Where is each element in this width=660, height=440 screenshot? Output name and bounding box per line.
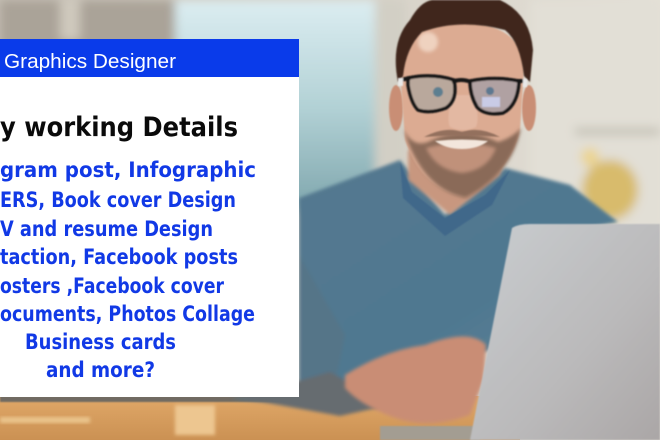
service list bbox=[0, 158, 256, 382]
service list: Business cards bbox=[25, 330, 176, 354]
table top bbox=[0, 396, 520, 440]
service list: and more? bbox=[46, 358, 155, 382]
service list: osters ,Facebook cover bbox=[0, 274, 225, 298]
beard bbox=[403, 128, 521, 198]
nose bbox=[448, 95, 478, 130]
neck bbox=[408, 140, 505, 215]
sweater collar bbox=[400, 162, 510, 236]
ears bbox=[389, 85, 403, 131]
service list: V and resume Design bbox=[0, 217, 213, 241]
header bar bbox=[0, 39, 299, 77]
glasses bbox=[398, 76, 527, 114]
hand and forearm bbox=[345, 336, 486, 423]
face bbox=[400, 22, 524, 197]
service list: ERS, Book cover Design bbox=[0, 188, 236, 212]
panel: services card bbox=[0, 39, 299, 397]
sweater body and arm bbox=[230, 160, 618, 416]
smile bbox=[435, 140, 488, 149]
hair bbox=[396, 0, 533, 82]
service list: taction, Facebook posts bbox=[0, 245, 238, 269]
laptop bbox=[470, 224, 660, 440]
moustache bbox=[424, 130, 500, 137]
service list: gram post, Infographic bbox=[0, 158, 256, 182]
forehead highlight bbox=[418, 32, 438, 52]
service list: ocuments, Photos Collage bbox=[0, 302, 255, 326]
man in blue sweater bbox=[230, 0, 618, 423]
header bar: Graphics Designer bbox=[4, 51, 176, 73]
chin skin bbox=[426, 143, 496, 173]
heading: y working Details bbox=[0, 112, 238, 143]
